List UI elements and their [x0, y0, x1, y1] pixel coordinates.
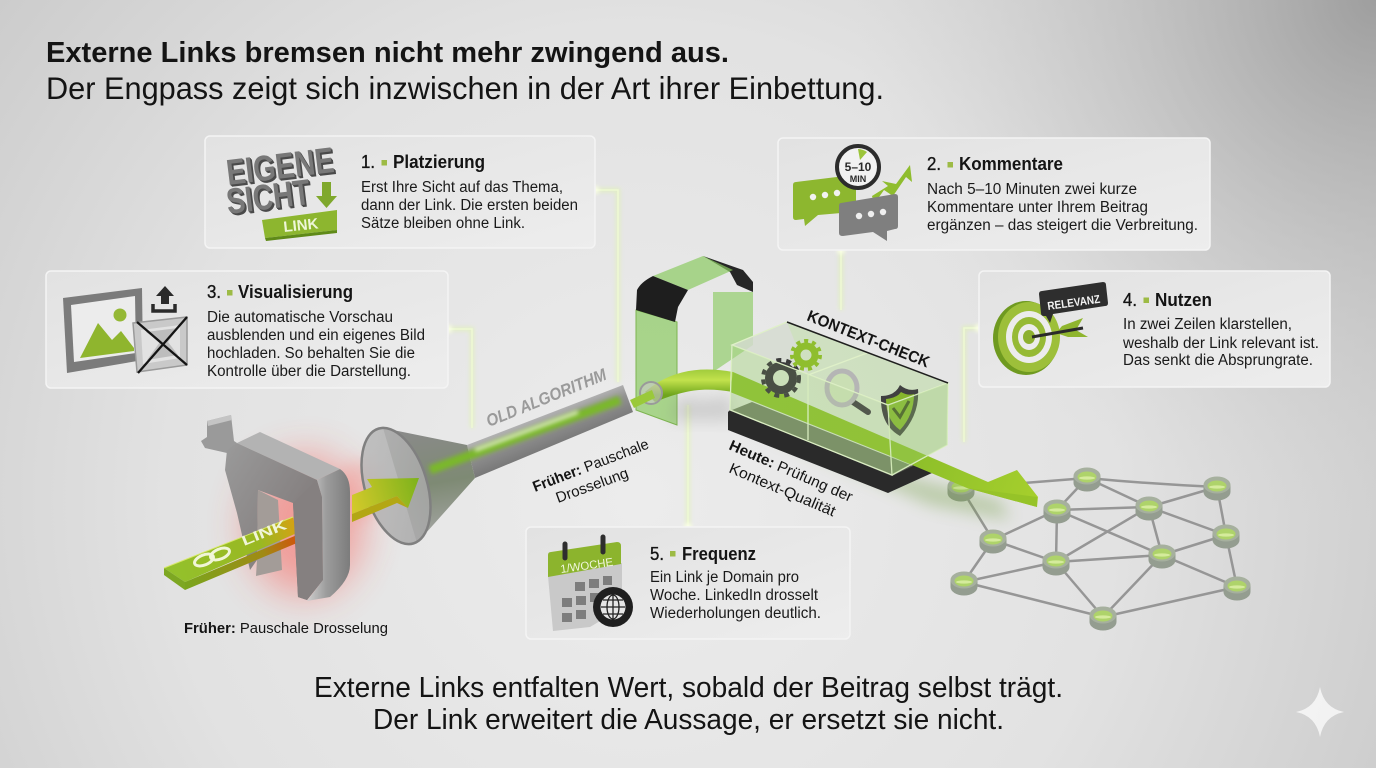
heading: 3. — [207, 282, 221, 302]
text block: weshalb der Link relevant ist. — [1122, 335, 1319, 352]
title — [46, 37, 884, 106]
closing statement — [314, 672, 1063, 736]
panel: 1 Platzierung — [205, 136, 595, 248]
text block — [650, 569, 821, 622]
text block: hochladen. So behalten Sie die — [207, 345, 415, 362]
title: Der Engpass zeigt sich inzwischen in der Art ihrer Einbettung. — [46, 70, 884, 106]
text block: Das senkt die Absprungrate. — [1123, 352, 1313, 369]
icon: comments and clock: MIN — [850, 174, 866, 184]
heading — [650, 544, 756, 564]
icon: Eigene Sicht Link: LINK — [283, 215, 319, 236]
text block: Woche. LinkedIn drosselt — [650, 587, 819, 604]
icon: comments and clock — [793, 146, 912, 241]
funnel pipe — [349, 385, 633, 552]
box back faces — [730, 322, 948, 475]
icon: calendar with globe: 1/WOCHE — [560, 557, 614, 576]
caption: today: Kontext-Qualität — [726, 460, 839, 521]
text block: Wiederholungen deutlich. — [650, 605, 821, 622]
inner clamp wall — [256, 490, 282, 576]
icon: comments and clock: 5–10 — [845, 160, 872, 174]
heading: 2. — [927, 154, 941, 174]
dark base — [728, 410, 932, 493]
box edges — [730, 322, 948, 475]
link clamp with red glow — [164, 415, 382, 601]
caption: early funnel: Früher: Pauschale — [530, 436, 651, 496]
heading: 1. — [361, 152, 375, 172]
heading: 5. — [650, 544, 664, 564]
heading: Nutzen — [1155, 290, 1212, 310]
heading — [1123, 290, 1212, 310]
big arrow — [730, 372, 1038, 507]
caption: early funnel: Drosselung — [554, 465, 631, 507]
green arrow into funnel — [352, 478, 419, 522]
closing statement: Der Link erweitert die Aussage, er ersetzt sie nicht. — [373, 704, 1004, 736]
icon: gears — [763, 341, 820, 396]
icon: shield — [881, 385, 918, 436]
clamp top face — [237, 432, 340, 480]
text block: Kontrolle über die Darstellung. — [207, 363, 411, 380]
link bar — [164, 516, 297, 590]
text block: dann der Link. Die ersten beiden — [361, 197, 578, 214]
text block: ausblenden und ein eigenes Bild — [207, 327, 425, 344]
icon: Eigene Sicht Link — [224, 139, 337, 241]
link bar: LINK — [239, 516, 289, 549]
panel: 2 Kommentare — [778, 138, 1210, 250]
text block — [207, 309, 425, 380]
heading: Platzierung — [393, 152, 485, 172]
green gate — [636, 256, 753, 425]
icon: magnifier — [827, 371, 868, 412]
context check box — [630, 322, 1038, 507]
clamp front left — [225, 443, 323, 600]
network — [948, 468, 1250, 630]
heading: Frequenz — [682, 544, 756, 564]
icon: image upload — [63, 286, 187, 373]
icon: Eigene Sicht Link: EIGENE — [224, 139, 336, 193]
caption: today: Heute: Prüfung der — [726, 437, 855, 506]
clamp tab — [201, 415, 237, 453]
title: Externe Links bremsen nicht mehr zwingend aus. — [46, 37, 729, 69]
shadow of arrow — [670, 395, 1010, 520]
connector lines — [444, 186, 983, 531]
panel: 3 Visualisierung — [46, 271, 448, 388]
text block — [361, 179, 578, 232]
kontext-check label: KONTEXT-CHECK — [805, 308, 932, 372]
clamp right leg — [293, 469, 350, 601]
text block: In zwei Zeilen klarstellen, — [1123, 316, 1292, 333]
text block: ergänzen – das steigert die Verbreitung. — [927, 217, 1198, 234]
text block — [1122, 316, 1319, 369]
text block: Die automatische Vorschau — [207, 309, 393, 326]
heading: Visualisierung — [238, 282, 353, 302]
heading: 4. — [1123, 290, 1137, 310]
text block: Ein Link je Domain pro — [650, 569, 799, 586]
icon: calendar with globe — [548, 537, 633, 631]
icon: Eigene Sicht Link: SICHT — [224, 171, 312, 222]
old algorithm label: OLD ALGORITHM — [483, 365, 610, 431]
icon: sparkle — [1296, 687, 1344, 737]
caption: clamp: Früher: Pauschale Drosselung — [184, 620, 388, 637]
closing statement: Externe Links entfalten Wert, sobald der Beitrag selbst trägt. — [314, 672, 1063, 704]
text block: Sätze bleiben ohne Link. — [361, 215, 525, 232]
icon: target with relevance tag — [993, 282, 1108, 375]
icon: target with relevance tag: RELEVANZ — [1047, 294, 1101, 313]
text block: Kommentare unter Ihrem Beitrag — [927, 199, 1148, 216]
text block: Nach 5–10 Minuten zwei kurze — [927, 181, 1137, 198]
green tube — [645, 369, 733, 402]
panel: 5 Frequenz — [526, 527, 850, 639]
panel: 4 Nutzen — [979, 271, 1330, 387]
heading: Kommentare — [959, 154, 1063, 174]
text block: Erst Ihre Sicht auf das Thema, — [361, 179, 563, 196]
text block — [927, 181, 1198, 234]
